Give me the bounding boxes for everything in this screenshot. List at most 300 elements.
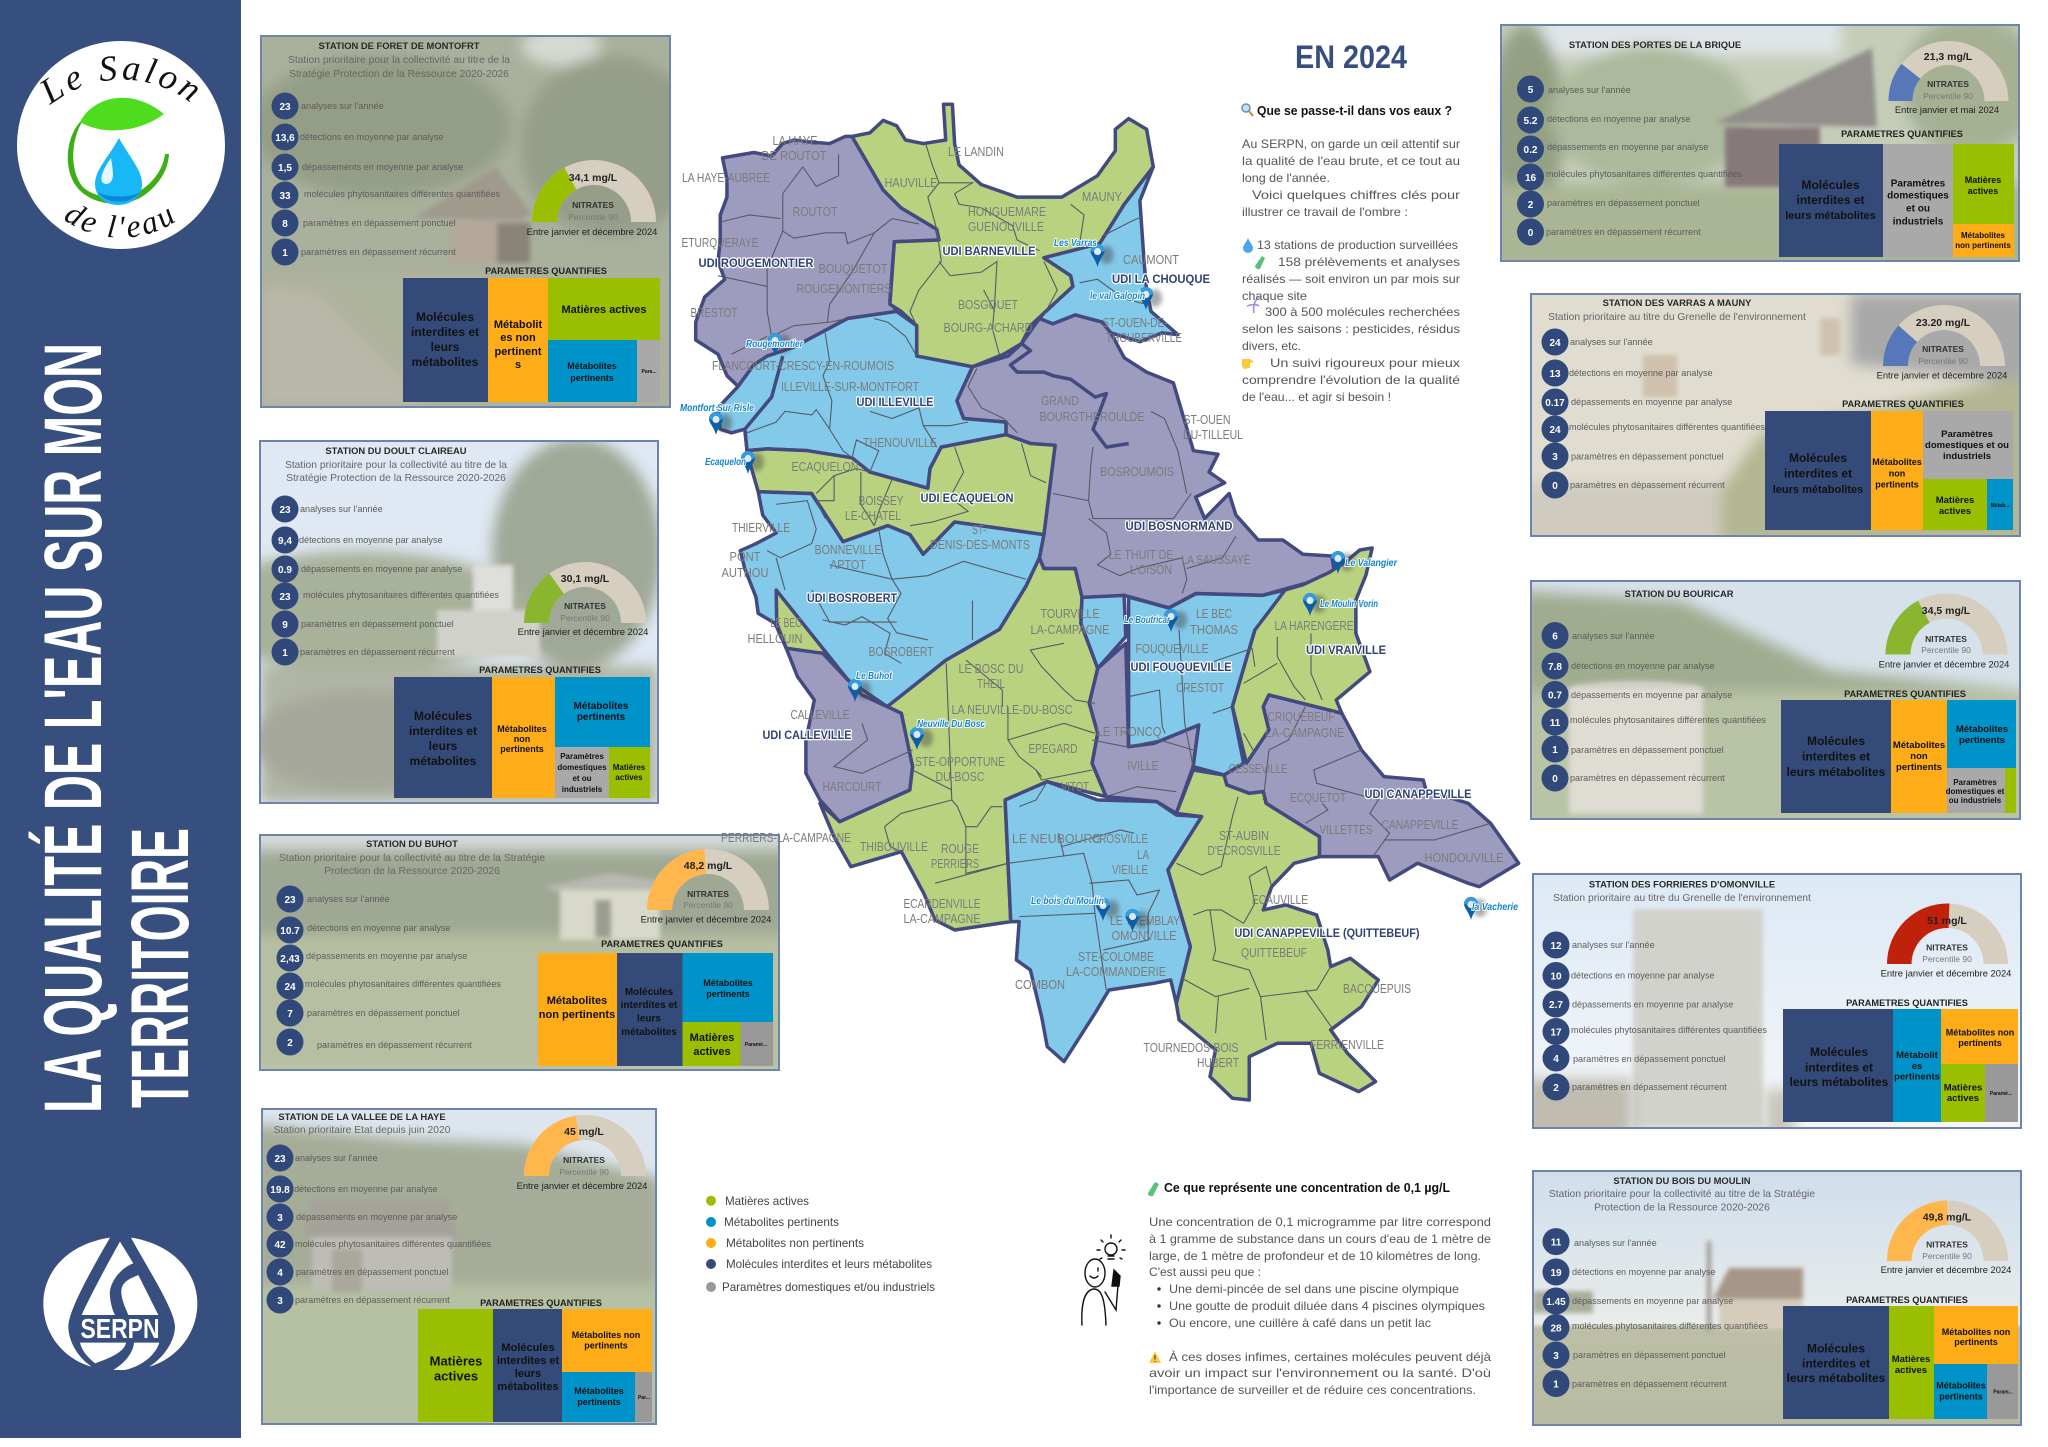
commune names: LA HAYE bbox=[772, 133, 818, 148]
key figures: 33 bbox=[279, 191, 291, 202]
key figures: 4 bbox=[277, 1268, 283, 1279]
treemap: parametres quantifies: pertinents bbox=[584, 1340, 628, 1350]
treemap: parametres quantifies: pertinents bbox=[1894, 1072, 1940, 1082]
text block: que se passe-t-il: selon les saisons : pesticides, résidus bbox=[1242, 322, 1460, 336]
station pins bbox=[680, 238, 1518, 932]
text block: que se passe-t-il: la qualité de l'eau brute, et ce tout au bbox=[1242, 154, 1460, 168]
treemap: parametres quantifies: Métab... bbox=[1991, 503, 2010, 509]
commune names: ROUGE bbox=[941, 841, 979, 856]
treemap: parametres quantifies: Matières bbox=[1892, 1354, 1930, 1365]
treemap: parametres quantifies: Molécules bbox=[625, 987, 674, 998]
text block: concentration de 0,1 µg/L: Ou encore, une cuillère à café dans un petit lac bbox=[1169, 1316, 1431, 1330]
treemap: parametres quantifies: Paramètres bbox=[1891, 178, 1946, 190]
commune names: STE-OPPORTUNE bbox=[915, 754, 1005, 769]
key figures: analyses sur l'année bbox=[1572, 631, 1655, 641]
commune names: ECARDENVILLE bbox=[904, 896, 981, 911]
station pins: le val Galopin bbox=[1090, 291, 1145, 302]
commune names: THEIL bbox=[977, 676, 1005, 691]
station pins: Neuville Du Bosc bbox=[917, 719, 985, 730]
station title: Station prioritaire pour la collectivité au titre de la bbox=[288, 55, 510, 66]
treemap: parametres quantifies: Métabolites bbox=[547, 995, 607, 1007]
commune names: ST-OUEN-DE- bbox=[1102, 315, 1168, 330]
commune names: CANAPPEVILLE bbox=[1382, 817, 1459, 832]
treemap: parametres quantifies: Paramè... bbox=[1990, 1091, 2013, 1097]
treemap: parametres quantifies: interdites et bbox=[409, 724, 477, 738]
commune names: THIERVILLE bbox=[732, 520, 790, 535]
commune names: BOISSEY bbox=[858, 493, 904, 508]
icon: magnifier bbox=[1242, 104, 1253, 116]
icon: DNA bbox=[1247, 297, 1259, 313]
treemap: parametres quantifies: Métabolites bbox=[1936, 1380, 1986, 1390]
station title: STATION DU BOIS DU MOULIN bbox=[1613, 1175, 1751, 1186]
key figures: 42 bbox=[274, 1240, 286, 1251]
nitrates gauge: Percentile 90 bbox=[1918, 356, 1968, 366]
text block: concentration de 0,1 µg/L: Ce que représente une concentration de 0,1 µg/L bbox=[1164, 1181, 1450, 1195]
key figures: 23 bbox=[279, 592, 291, 603]
nitrates gauge: NITRATES bbox=[1927, 79, 1969, 89]
station pins: Le bois du Moulin bbox=[1031, 896, 1104, 907]
key figures: 7.8 bbox=[1548, 662, 1562, 673]
key figures: 0 bbox=[1552, 481, 1558, 492]
nitrates gauge: Percentile 90 bbox=[560, 613, 610, 623]
text block: concentration de 0,1 µg/L: à 1 gramme de substance dans un cours d'eau de 1 mètre de bbox=[1149, 1232, 1491, 1246]
commune names: L'OISON bbox=[1130, 562, 1172, 577]
nitrates gauge: Entre janvier et mai 2024 bbox=[1895, 104, 1999, 115]
key figures: détections en moyenne par analyse bbox=[1571, 661, 1715, 671]
treemap: parametres quantifies: s bbox=[515, 359, 521, 371]
commune names: ROUTOT bbox=[792, 204, 838, 219]
treemap: parametres quantifies: Métabolites bbox=[574, 1386, 624, 1396]
nitrates gauge: Entre janvier et décembre 2024 bbox=[1877, 370, 2007, 380]
commune names: ROUGEMONTIERS bbox=[796, 281, 892, 296]
text block: concentration de 0,1 µg/L: Une concentration de 0,1 microgramme par litre correspond bbox=[1149, 1215, 1491, 1229]
key figures bbox=[272, 496, 499, 666]
key figures: 10 bbox=[1550, 972, 1562, 982]
station title: STATION DU BOURICAR bbox=[1624, 588, 1734, 599]
station pins: Le Boutricar bbox=[1124, 615, 1171, 626]
panel: station des Portes de la Brique bbox=[1488, 15, 2041, 271]
key figures bbox=[276, 886, 501, 1056]
commune names: ST-AUBIN bbox=[1219, 828, 1269, 843]
key figures bbox=[1542, 328, 1765, 498]
commune names: OMONVILLE bbox=[1112, 928, 1177, 943]
commune names: ECAUVILLE bbox=[1252, 892, 1308, 907]
treemap: parametres quantifies: Matières bbox=[690, 1032, 734, 1044]
text block: que se passe-t-il: de l'eau... et agir si besoin ! bbox=[1242, 390, 1391, 404]
panel: station du Buhot bbox=[250, 835, 790, 1075]
UDI names: UDI ECAQUELON bbox=[920, 491, 1014, 505]
commune names: D'ECROSVILLE bbox=[1208, 843, 1281, 858]
key figures: dépassements en moyenne par analyse bbox=[1572, 1296, 1733, 1306]
commune names: APTOT bbox=[830, 557, 866, 572]
treemap: parametres quantifies bbox=[1783, 1295, 2018, 1419]
station pins: Ecaquelon bbox=[705, 457, 746, 468]
nitrates gauge: Percentile 90 bbox=[568, 212, 618, 222]
station title: Station prioritaire Etat depuis juin 2020 bbox=[274, 1125, 451, 1136]
nitrates gauge: Entre janvier et décembre 2024 bbox=[1881, 1264, 2011, 1275]
treemap: parametres quantifies: Métabolites bbox=[567, 361, 617, 371]
nitrates gauge bbox=[1881, 1200, 2011, 1275]
treemap: parametres quantifies: et ou bbox=[1906, 204, 1930, 214]
nitrates gauge: Entre janvier et décembre 2024 bbox=[517, 1180, 647, 1191]
UDI names: UDI ROUGEMONTIER bbox=[698, 256, 814, 270]
treemap: parametres quantifies: actives bbox=[1939, 506, 1971, 517]
photo background bbox=[1532, 295, 2019, 535]
key figures: paramètres en dépassement ponctuel bbox=[301, 619, 454, 629]
key figures: 0 bbox=[1528, 228, 1534, 239]
treemap: parametres quantifies: Molécules bbox=[1807, 734, 1865, 748]
key figures: paramètres en dépassement ponctuel bbox=[1573, 1054, 1726, 1064]
treemap: parametres quantifies: Paramètres bbox=[560, 752, 604, 761]
UDI names: UDI CANAPPEVILLE bbox=[1364, 787, 1472, 801]
commune names: BRESTOT bbox=[690, 305, 738, 320]
commune names: DE ROUTOT bbox=[762, 148, 827, 163]
treemap: parametres quantifies: Molécules bbox=[416, 310, 474, 324]
key figures: 10.7 bbox=[280, 926, 300, 937]
commune names: HELLOUIN bbox=[748, 631, 802, 646]
treemap: parametres quantifies: non pertinents bbox=[539, 1009, 615, 1021]
text block: que se passe-t-il: 158 prélèvements et analyses bbox=[1278, 255, 1460, 269]
commune names: VILLETTES bbox=[1320, 822, 1373, 837]
key figures: 24 bbox=[284, 982, 296, 993]
treemap: parametres quantifies: Molécules bbox=[501, 1342, 555, 1354]
station title: STATION DU BUHOT bbox=[366, 838, 458, 849]
treemap: parametres quantifies: Molécules bbox=[1801, 178, 1860, 192]
commune names: BOSROUMOIS bbox=[1100, 464, 1174, 479]
commune names: ST- bbox=[972, 522, 986, 537]
treemap: parametres quantifies: PARAMETRES QUANTIFIES bbox=[601, 939, 723, 949]
commune names: HAUVILLE bbox=[884, 175, 938, 190]
thick internal boundaries bbox=[745, 344, 1129, 451]
text block: concentration de 0,1 µg/L: C'est aussi peu que : bbox=[1149, 1265, 1261, 1279]
treemap: parametres quantifies: Métabolit bbox=[1896, 1050, 1939, 1061]
nitrates gauge: NITRATES bbox=[1922, 344, 1964, 354]
treemap: parametres quantifies: Matières bbox=[1944, 1082, 1982, 1094]
treemap: parametres quantifies: es bbox=[1912, 1061, 1922, 1072]
treemap: parametres quantifies bbox=[394, 665, 650, 798]
nitrates gauge: Percentile 90 bbox=[559, 1167, 609, 1177]
treemap: parametres quantifies: leurs métabolites bbox=[1787, 1371, 1886, 1385]
treemap: parametres quantifies: pertinents bbox=[1954, 1337, 1998, 1347]
commune names: STE-COLOMBE bbox=[1078, 949, 1154, 964]
photo background bbox=[1532, 582, 2019, 818]
UDI names bbox=[698, 244, 1472, 940]
treemap: parametres quantifies: pertinents bbox=[1959, 735, 2005, 746]
nitrates gauge: 30,1 mg/L bbox=[561, 573, 610, 585]
icon: test tube bbox=[1255, 256, 1265, 269]
commune names: THENOUVILLE bbox=[863, 435, 937, 450]
station title: Station prioritaire pour la collectivité au titre de la Stratégie bbox=[1549, 1189, 1815, 1200]
commune names: BACQUEPUIS bbox=[1343, 981, 1411, 996]
key figures bbox=[1517, 76, 1742, 246]
commune names: COMBON bbox=[1015, 977, 1065, 992]
treemap: parametres quantifies: leurs métabolites bbox=[1773, 484, 1863, 496]
key figures: détections en moyenne par analyse bbox=[299, 535, 443, 545]
key figures: 1 bbox=[1552, 745, 1558, 756]
station title: Protection de la Ressource 2020-2026 bbox=[324, 866, 500, 877]
key figures: 11 bbox=[1550, 718, 1561, 729]
station title bbox=[1549, 1175, 1815, 1214]
key figures: paramètres en dépassement récurrent bbox=[1570, 480, 1725, 490]
key figures: 23 bbox=[279, 505, 291, 516]
text block: concentration de 0,1 µg/L: À ces doses infimes, certaines molécules peuvent déjà bbox=[1169, 1349, 1491, 1364]
treemap: parametres quantifies: Molécules bbox=[1789, 451, 1847, 465]
treemap: parametres quantifies: Paramè... bbox=[745, 1042, 768, 1048]
commune names: CAUMONT bbox=[1123, 252, 1179, 267]
commune names: BOSROBERT bbox=[868, 644, 934, 659]
treemap: parametres quantifies: Matières actives bbox=[562, 304, 646, 316]
commune boundaries, southern part bbox=[823, 617, 1491, 1040]
station title: Station prioritaire au titre du Grenelle de l'environnement bbox=[1548, 312, 1806, 323]
key figures: analyses sur l'année bbox=[1574, 1238, 1657, 1248]
station title: Stratégie Protection de la Ressource 2020-2026 bbox=[289, 69, 509, 80]
commune names: LA-CAMPAGNE bbox=[1030, 622, 1110, 637]
panel: station des Forrieres d'Omonville bbox=[1523, 874, 2021, 1139]
key figures: molécules phytosanitaires différentes quantifiées bbox=[303, 590, 499, 600]
commune names: LE TRONCQ bbox=[1096, 724, 1162, 739]
nitrates gauge: Percentile 90 bbox=[1922, 1251, 1972, 1261]
treemap: parametres quantifies: interdites et bbox=[411, 325, 479, 339]
nitrates gauge: NITRATES bbox=[564, 601, 606, 611]
treemap: parametres quantifies: PARAMETRES QUANTIFIES bbox=[1844, 689, 1966, 699]
key figures: 2.7 bbox=[1549, 1000, 1563, 1011]
key figures: 3 bbox=[277, 1213, 283, 1224]
treemap: parametres quantifies: Métabolites bbox=[1961, 231, 2006, 240]
photo background bbox=[262, 37, 669, 406]
station title: STATION DE LA VALLEE DE LA HAYE bbox=[278, 1111, 446, 1122]
nitrates gauge: 49,8 mg/L bbox=[1923, 1212, 1972, 1224]
icon: pointing hand bbox=[1242, 359, 1254, 369]
key figures: 13,6 bbox=[275, 133, 295, 144]
text block: concentration de 0,1 µg/L bbox=[1148, 1181, 1491, 1397]
key figures: 1,5 bbox=[278, 163, 292, 174]
treemap: parametres quantifies: Para... bbox=[641, 369, 657, 375]
UDI names: UDI BOSNORMAND bbox=[1126, 519, 1233, 533]
treemap: parametres quantifies: actives bbox=[1968, 186, 1998, 196]
nitrates gauge bbox=[518, 562, 648, 637]
commune names: HARCOURT bbox=[822, 779, 882, 794]
nitrates gauge bbox=[641, 849, 771, 924]
legend: Matières actives bbox=[725, 1194, 809, 1208]
panel: station de Foret de Montfort bbox=[251, 26, 701, 407]
treemap: parametres quantifies: actives bbox=[1947, 1093, 1979, 1104]
text block: que se passe-t-il: Un suivi rigoureux pour mieux bbox=[1270, 356, 1460, 370]
key figures: 17 bbox=[1550, 1028, 1562, 1038]
key figures: molécules phytosanitaires différentes quantifiées bbox=[305, 979, 501, 989]
treemap: parametres quantifies: Matières bbox=[430, 1354, 482, 1368]
text block: que se passe-t-il bbox=[1242, 104, 1460, 404]
treemap: parametres quantifies: pertinents bbox=[570, 373, 614, 383]
station title: Station prioritaire pour la collectivité au titre de la Stratégie bbox=[279, 853, 545, 864]
commune names: LE BEC bbox=[1196, 606, 1232, 621]
treemap: parametres quantifies: pertinents bbox=[1958, 1038, 2002, 1048]
photo background bbox=[261, 836, 778, 1069]
key figures: 0 bbox=[1552, 774, 1558, 785]
treemap: parametres quantifies: PARAMETRES QUANTIFIES bbox=[485, 266, 607, 276]
key figures: dépassements en moyenne par analyse bbox=[1547, 142, 1708, 152]
commune names: TOURVILLE bbox=[1040, 606, 1100, 621]
key figures: analyses sur l'année bbox=[1572, 940, 1655, 950]
key figures: 3 bbox=[277, 1296, 283, 1307]
treemap: parametres quantifies: non bbox=[1889, 468, 1905, 478]
nitrates gauge: Percentile 90 bbox=[1921, 645, 1971, 655]
treemap: parametres quantifies: pertinents bbox=[577, 712, 626, 723]
text block: que se passe-t-il: réalisés — soit environ un par mois sur bbox=[1242, 272, 1460, 286]
treemap: parametres quantifies: Métabolites non bbox=[572, 1330, 640, 1340]
station title bbox=[1553, 878, 1811, 904]
treemap: parametres quantifies: non bbox=[1910, 751, 1928, 762]
commune names: TOURNEDOS-BOIS bbox=[1144, 1040, 1239, 1055]
photo background bbox=[1534, 1172, 2020, 1424]
heading: EN 2024: EN 2024 bbox=[1295, 39, 1407, 75]
key figures: détections en moyenne par analyse bbox=[1571, 970, 1715, 980]
legend: Molécules interdites et leurs métabolites bbox=[726, 1257, 932, 1271]
key figures: 6 bbox=[1552, 632, 1558, 642]
treemap: parametres quantifies: industriels bbox=[1893, 216, 1944, 228]
text block: que se passe-t-il: chaque site bbox=[1242, 289, 1307, 303]
commune names: LA HARENGERE bbox=[1274, 618, 1354, 633]
key figures: 4 bbox=[1553, 1054, 1559, 1065]
key figures: molécules phytosanitaires différentes quantifiées bbox=[1570, 715, 1766, 725]
nitrates gauge bbox=[527, 160, 657, 237]
key figures: paramètres en dépassement ponctuel bbox=[1547, 198, 1700, 208]
commune names: LA NEUVILLE-DU-BOSC bbox=[952, 702, 1072, 717]
key figures: 2 bbox=[287, 1038, 293, 1049]
commune names: ILLEVILLE-SUR-MONTFORT bbox=[781, 379, 919, 394]
treemap: parametres quantifies: Métabolites bbox=[497, 724, 547, 734]
nitrates gauge: 34,1 mg/L bbox=[569, 172, 618, 184]
key figures: 0.9 bbox=[278, 565, 292, 576]
treemap: parametres quantifies: métabolites bbox=[412, 355, 479, 369]
key figures: 0.7 bbox=[1548, 690, 1562, 702]
key figures: analyses sur l'année bbox=[301, 101, 384, 111]
treemap: parametres quantifies: Matières bbox=[1936, 495, 1974, 506]
photo background bbox=[263, 1110, 655, 1423]
key figures: paramètres en dépassement récurrent bbox=[1570, 773, 1725, 783]
station title bbox=[288, 40, 510, 80]
commune names: CRESTOT bbox=[1176, 680, 1224, 695]
commune names: BOURGTHEROULDE bbox=[1040, 409, 1145, 424]
panel: station des Varras a Mauny bbox=[1521, 294, 2031, 544]
treemap: parametres quantifies bbox=[1783, 998, 2018, 1122]
commune names: FLANCOURT-CRESCY-EN-ROUMOIS bbox=[712, 358, 894, 373]
station pins: Le Buhot bbox=[856, 671, 893, 682]
treemap: parametres quantifies: pertinents bbox=[1875, 480, 1919, 490]
nitrates gauge bbox=[1888, 41, 2008, 115]
commune names: THOMAS bbox=[1190, 622, 1238, 637]
key figures: détections en moyenne par analyse bbox=[1569, 368, 1713, 378]
treemap: parametres quantifies: pertinent bbox=[494, 346, 542, 358]
commune names: LE NEUBOURG bbox=[1012, 831, 1102, 846]
key figures: détections en moyenne par analyse bbox=[307, 923, 451, 933]
key figures: analyses sur l'année bbox=[307, 894, 390, 904]
treemap: parametres quantifies: actives bbox=[615, 773, 643, 782]
key figures: 2 bbox=[1553, 1083, 1559, 1094]
key figures bbox=[1542, 932, 1767, 1100]
nitrates gauge bbox=[1881, 903, 2011, 979]
key figures: dépassements en moyenne par analyse bbox=[1571, 690, 1732, 700]
key figures: détections en moyenne par analyse bbox=[300, 132, 444, 142]
treemap: parametres quantifies: Paramètres bbox=[1953, 778, 1997, 787]
key figures: détections en moyenne par analyse bbox=[1572, 1267, 1716, 1277]
nitrates gauge: NITRATES bbox=[1926, 1240, 1968, 1250]
station title: STATION DU DOULT CLAIREAU bbox=[325, 445, 467, 456]
commune names: CESSEVILLE bbox=[1228, 761, 1288, 776]
map: UDI territories bbox=[680, 104, 1519, 1100]
treemap: parametres quantifies: non pertinents bbox=[1955, 241, 2011, 250]
treemap: parametres quantifies: Molécules bbox=[1810, 1045, 1868, 1059]
key figures: détections en moyenne par analyse bbox=[294, 1184, 438, 1194]
key figures: 0.2 bbox=[1524, 145, 1538, 156]
key figures: paramètres en dépassement ponctuel bbox=[1573, 1350, 1726, 1360]
text block: concentration de 0,1 µg/L: Une goutte de produit diluée dans 4 piscines olympiques bbox=[1169, 1299, 1485, 1313]
treemap: parametres quantifies: Métabolites bbox=[1893, 740, 1945, 751]
commune names: EPEGARD bbox=[1028, 741, 1078, 756]
key figures: paramètres en dépassement récurrent bbox=[317, 1040, 472, 1050]
treemap: parametres quantifies: leurs bbox=[429, 739, 458, 753]
treemap: parametres quantifies: leurs bbox=[637, 1014, 661, 1024]
main title bbox=[28, 343, 206, 1113]
commune names: HONGUEMARE bbox=[968, 204, 1046, 219]
treemap: parametres quantifies: interdites et bbox=[497, 1355, 560, 1367]
treemap: parametres quantifies: Métabolites non bbox=[1946, 1028, 2014, 1038]
text block: concentration de 0,1 µg/L: l'importance de surveiller et de réduire ces concentrations. bbox=[1149, 1383, 1476, 1397]
commune names: LA bbox=[1137, 847, 1149, 862]
commune names: ECQUETOT bbox=[1290, 790, 1346, 805]
treemap: parametres quantifies: Paramètres bbox=[1941, 429, 1993, 440]
treemap: parametres quantifies bbox=[1781, 689, 2016, 813]
treemap: parametres quantifies: es non bbox=[500, 332, 536, 344]
treemap: parametres quantifies: Molécules bbox=[414, 709, 472, 723]
commune names: AUTHOU bbox=[722, 565, 768, 580]
treemap: parametres quantifies: domestiques bbox=[1887, 190, 1949, 202]
UDI names: UDI ILLEVILLE bbox=[856, 395, 934, 409]
treemap: parametres quantifies: pertinents bbox=[706, 989, 750, 999]
commune names: DU-TILLEUL bbox=[1183, 427, 1243, 442]
station pins: Les Varras bbox=[1054, 238, 1097, 249]
commune names: VIEILLE bbox=[1112, 862, 1148, 877]
treemap: parametres quantifies: leurs métabolites bbox=[1790, 1075, 1889, 1089]
treemap: parametres quantifies: Par... bbox=[638, 1395, 651, 1401]
icon: test tube bbox=[1148, 1182, 1159, 1196]
commune names: LA-CAMPAGNE bbox=[1266, 725, 1345, 740]
treemap: parametres quantifies: Métabolit bbox=[494, 319, 542, 331]
logo: Le Salon de l'eau: de l'eau bbox=[65, 206, 176, 238]
treemap: parametres quantifies: interdites et bbox=[1796, 193, 1865, 207]
commune names: BOSGOUET bbox=[958, 297, 1018, 312]
station pins: la Vacherie bbox=[1472, 902, 1518, 913]
station title: STATION DE FORET DE MONTOFRT bbox=[319, 40, 480, 51]
commune boundaries, northern part bbox=[718, 144, 1236, 640]
text block: concentration de 0,1 µg/L: avoir un impact sur l'environnement ou la santé. D'où bbox=[1149, 1366, 1491, 1380]
nitrates gauge: 23.20 mg/L bbox=[1916, 317, 1971, 329]
sidebar bbox=[0, 0, 241, 1438]
logo: SERPN bbox=[43, 1238, 197, 1370]
key figures: analyses sur l'année bbox=[1548, 85, 1631, 95]
photo background bbox=[1534, 875, 2020, 1127]
commune names: LA HAYE-AUBREE bbox=[682, 170, 770, 185]
treemap: parametres quantifies: non bbox=[514, 734, 530, 744]
commune names: CALLEVILLE bbox=[790, 707, 850, 722]
treemap: parametres quantifies: PARAMETRES QUANTIFIES bbox=[1846, 1295, 1968, 1305]
treemap: parametres quantifies: leurs métabolites bbox=[1787, 765, 1886, 779]
commune names: LA-COMMANDERIE bbox=[1066, 964, 1166, 979]
UDI names: UDI CANAPPEVILLE (QUITTEBEUF) bbox=[1234, 926, 1420, 940]
treemap: parametres quantifies: métabolites bbox=[410, 754, 477, 768]
treemap: parametres quantifies: leurs bbox=[515, 1368, 541, 1380]
map regions, southern part bbox=[740, 492, 1519, 1100]
key figures bbox=[266, 1144, 491, 1314]
